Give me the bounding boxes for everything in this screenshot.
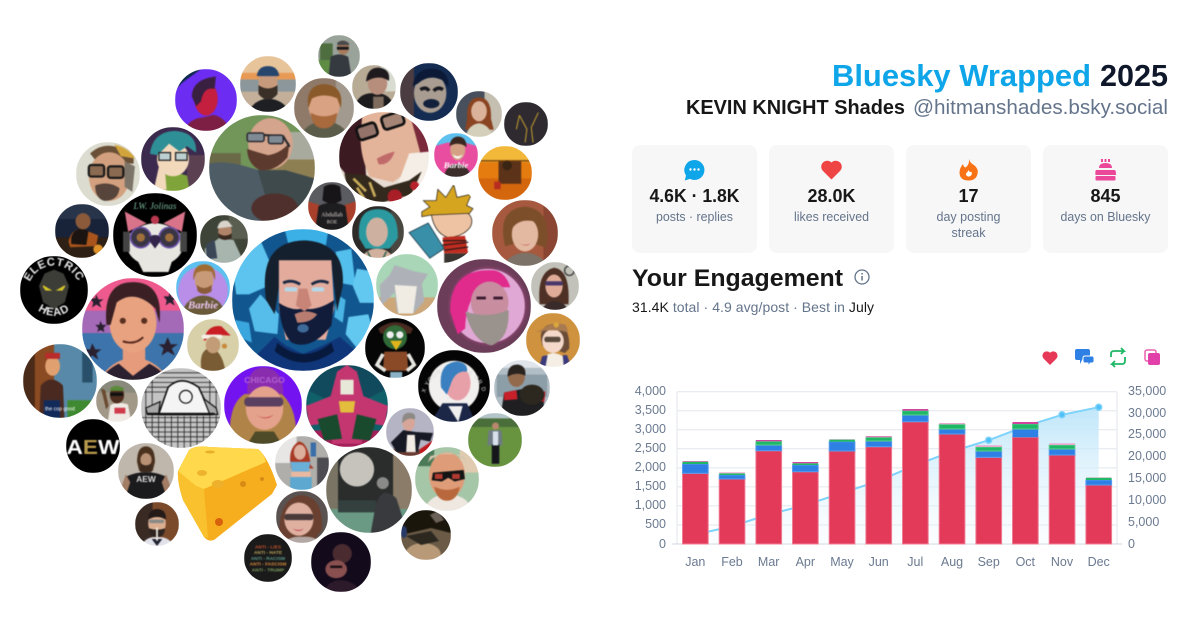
avatar: cat photo bbox=[401, 510, 451, 560]
avatar: brown hair woman with glasses bbox=[276, 491, 328, 543]
engagement summary: 31.4K total · 4.9 avg/post · Best in July bbox=[632, 299, 874, 315]
legend bbox=[1042, 348, 1160, 367]
month labels: Oct bbox=[1016, 555, 1036, 569]
left axis labels: 2,500 bbox=[635, 441, 666, 455]
avatar: bi flag portrait bbox=[82, 278, 184, 380]
bar: Dec bbox=[1086, 477, 1112, 544]
avatar: dark bangs woman bbox=[352, 65, 396, 109]
avatar: anti slogans: ANTI - FASCISM bbox=[250, 562, 286, 568]
card: posts and replies: 4.6K · 1.8K bbox=[650, 186, 740, 206]
bar: Jun bbox=[866, 436, 892, 544]
right axis labels: 15,000 bbox=[1128, 471, 1166, 485]
avatar: cartoon girl with cap bbox=[526, 313, 580, 367]
month labels: Feb bbox=[721, 555, 743, 569]
avatar: big bald man with glasses bbox=[209, 115, 315, 221]
icon: info bbox=[855, 270, 869, 284]
avatar: Barbie man on lilac bbox=[176, 261, 230, 315]
avatar: cheese wedge bbox=[176, 444, 280, 542]
heading: your engagement: Your Engagement bbox=[632, 265, 843, 292]
avatar: beach cap man bbox=[240, 56, 296, 112]
card: days on Bluesky: 845 bbox=[1090, 186, 1121, 206]
left axis labels: 1,500 bbox=[635, 479, 666, 493]
cumulative area and line bbox=[695, 404, 1102, 544]
avatar: dark bunny bbox=[504, 102, 548, 146]
month labels: Mar bbox=[758, 555, 779, 569]
legend icon: replies bbox=[1075, 349, 1094, 366]
bar: Aug bbox=[939, 423, 965, 544]
month labels: Apr bbox=[796, 555, 815, 569]
avatar: man on grass bbox=[468, 413, 522, 467]
avatar: AEW shirt man: AEW bbox=[136, 474, 156, 484]
card: days on Bluesky bbox=[1043, 145, 1168, 253]
legend icon: quotes bbox=[1145, 350, 1160, 365]
left axis labels: 3,000 bbox=[635, 422, 666, 436]
month labels: Jun bbox=[869, 555, 889, 569]
month labels: Dec bbox=[1088, 555, 1110, 569]
avatar: top man with cup bbox=[318, 35, 360, 77]
card: day posting streak bbox=[906, 145, 1031, 253]
right axis labels: 20,000 bbox=[1128, 449, 1166, 463]
left axis labels: 0 bbox=[659, 537, 666, 551]
avatar: King of the Hill: the cop good bbox=[45, 407, 75, 413]
card: day posting streak: day posting bbox=[936, 210, 1001, 224]
avatar: electric head logo: ELECTRIC bbox=[22, 256, 84, 282]
right axis labels: 30,000 bbox=[1128, 406, 1166, 420]
avatar: AEW shirt man bbox=[118, 443, 174, 499]
bar: Sep bbox=[976, 445, 1002, 544]
right axis labels: 35,000 bbox=[1128, 384, 1166, 398]
avatar: Chicago hat woman: CHICAGO bbox=[244, 375, 285, 385]
left axis labels: 500 bbox=[645, 517, 666, 531]
avatar: red hair woman bbox=[456, 91, 502, 137]
avatar: night photo man bbox=[55, 204, 109, 258]
right axis labels: 10,000 bbox=[1128, 493, 1166, 507]
bar: Oct bbox=[1012, 422, 1038, 544]
stacked bars bbox=[682, 409, 1112, 544]
avatar: AEW logo bbox=[66, 419, 120, 473]
legend icon: reposts bbox=[1111, 348, 1125, 367]
bar: Nov bbox=[1049, 443, 1075, 544]
avatar: red hair bearded man bbox=[294, 78, 354, 138]
avatar: woman with dark glasses bbox=[339, 112, 429, 202]
bar: Jul bbox=[902, 409, 928, 544]
bar: Mar bbox=[756, 440, 782, 544]
avatar: shark plush bbox=[376, 254, 438, 316]
avatar: small tee man bbox=[96, 380, 138, 422]
avatar: fix your hearts circular portrait bbox=[418, 350, 490, 422]
right axis labels: 25,000 bbox=[1128, 427, 1166, 441]
left axis labels: 2,000 bbox=[635, 460, 666, 474]
left axis labels: 4,000 bbox=[635, 384, 666, 398]
avatar: dog and woman bbox=[494, 360, 550, 416]
chart: monthly engagement bbox=[635, 384, 1166, 569]
avatar: AEW logo: AEW bbox=[67, 436, 120, 459]
avatar: sugar skull cat bbox=[113, 193, 197, 277]
avatar: anti slogans: ANTI - RACISM bbox=[251, 556, 285, 562]
avatar: dark couple bbox=[311, 532, 371, 592]
user name and handle: @hitmanshades.bsky.social bbox=[913, 97, 1168, 119]
avatar: sugar skull cat: LW. Jolinas bbox=[133, 201, 177, 211]
avatar cluster bbox=[20, 35, 580, 592]
icon: cake bbox=[1095, 159, 1116, 180]
avatar: anti slogans: ANTI - HATE bbox=[254, 550, 282, 556]
avatar: navy mask face bbox=[400, 63, 458, 121]
user name and handle: KEVIN KNIGHT Shades bbox=[686, 97, 905, 119]
month labels: Jul bbox=[907, 555, 923, 569]
title: Bluesky Wrapped bbox=[832, 59, 1091, 93]
avatar: anti slogans: ANTI - TRUMP bbox=[252, 567, 285, 573]
avatar: anti slogans bbox=[244, 534, 292, 582]
avatar: moon and figure bbox=[326, 447, 412, 533]
avatar: suit woman bbox=[386, 408, 434, 456]
avatar: electric head logo: HEAD bbox=[38, 304, 69, 317]
gridlines and axes bbox=[672, 392, 1122, 544]
avatar: teal hair woman bbox=[352, 206, 404, 258]
month labels: Sep bbox=[978, 555, 1000, 569]
bar: Apr bbox=[792, 462, 818, 544]
avatar: scribble sketch bbox=[141, 368, 221, 448]
month labels: Jan bbox=[685, 555, 705, 569]
avatar: main blue leaf portrait bbox=[232, 229, 374, 371]
card: day posting streak: 17 bbox=[958, 186, 979, 206]
avatar: purple red man bbox=[175, 69, 237, 131]
month labels: May bbox=[830, 555, 855, 569]
month labels bbox=[685, 555, 1110, 569]
left axis labels: 1,000 bbox=[635, 498, 666, 512]
card: likes received bbox=[769, 145, 894, 253]
card: day posting streak: streak bbox=[952, 226, 986, 240]
avatar: woman with purple glasses bbox=[531, 262, 579, 310]
avatar: backpack man bbox=[200, 215, 248, 263]
avatar: electric head logo bbox=[20, 256, 88, 324]
user name and handle bbox=[686, 97, 1168, 119]
card: likes received: 28.0K bbox=[808, 186, 856, 206]
left axis labels: 3,500 bbox=[635, 403, 666, 417]
icon: speech bubble bbox=[684, 160, 704, 180]
avatar: pink beard portrait bbox=[437, 259, 531, 353]
month labels: Nov bbox=[1051, 555, 1074, 569]
card: days on Bluesky: days on Bluesky bbox=[1060, 210, 1151, 224]
card: posts and replies bbox=[632, 145, 757, 253]
left axis labels bbox=[635, 384, 666, 551]
avatar: Barbie man on lilac: Barbie bbox=[187, 300, 218, 312]
icon: heart bbox=[821, 161, 842, 180]
avatar: King of the Hill bbox=[23, 344, 97, 418]
month labels: Aug bbox=[941, 555, 963, 569]
avatar: curly haired woman bbox=[492, 200, 558, 266]
avatar: glasses man in hat bbox=[76, 142, 140, 206]
title: 2025 bbox=[1100, 59, 1168, 93]
card: likes received: likes received bbox=[794, 210, 869, 224]
bar: Feb bbox=[719, 472, 745, 544]
avatar: Abdullah masked figure: ROE bbox=[327, 219, 337, 225]
avatar: cigarette man bbox=[135, 502, 179, 546]
right axis labels: 5,000 bbox=[1128, 515, 1159, 529]
avatar: Chicago hat woman bbox=[224, 366, 302, 444]
avatar: pink robot villain bbox=[306, 365, 388, 447]
bar: May bbox=[829, 439, 855, 544]
avatar: sunglasses bald man bbox=[415, 447, 479, 511]
avatar: santa hat portrait bbox=[187, 319, 239, 371]
avatar: parrot sheriff bbox=[365, 318, 425, 378]
avatar: teal hair cartoon bbox=[141, 127, 205, 191]
right axis labels: 0 bbox=[1128, 537, 1135, 551]
bar: Jan bbox=[682, 461, 708, 544]
right axis labels bbox=[1128, 384, 1166, 551]
icon: flame bbox=[960, 159, 978, 180]
avatar: Abdullah masked figure bbox=[308, 182, 356, 230]
avatar: mirror selfie red hair bbox=[275, 436, 329, 490]
avatar: Calvin reading bbox=[408, 184, 474, 263]
legend icon: likes bbox=[1042, 351, 1058, 365]
avatar: Abdullah masked figure: Abdullah bbox=[321, 213, 343, 219]
avatar: anti slogans: ANTI - LIES bbox=[255, 544, 281, 550]
avatar: Barbie man on pink bbox=[434, 133, 478, 177]
avatar: Barbie man on pink: Barbie bbox=[443, 160, 468, 170]
avatar: orange sunset bbox=[478, 146, 532, 200]
card: posts and replies: posts · replies bbox=[656, 210, 733, 224]
